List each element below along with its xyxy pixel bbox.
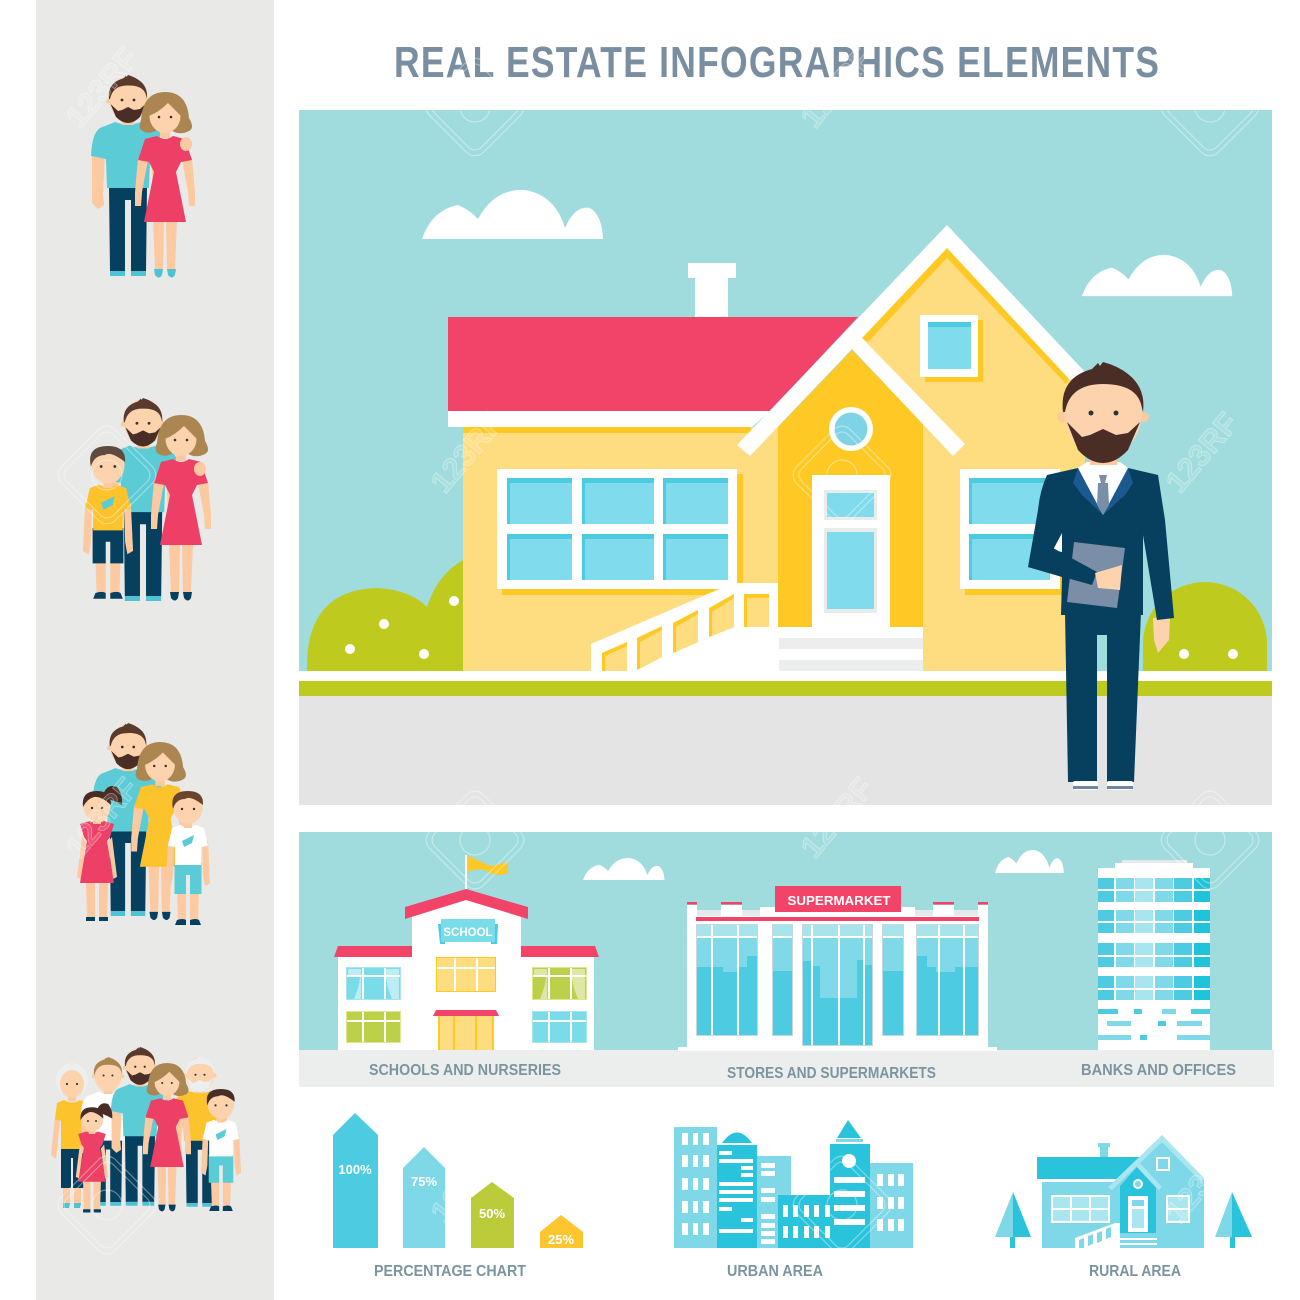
parapet [687,900,988,1047]
steps [778,627,923,672]
watermark text: 123RF [424,1136,510,1229]
family: couple with two children [77,723,210,925]
entrance block [778,350,923,627]
right hand [1153,618,1170,653]
gable yellow stripe [862,248,1070,384]
ground stripes [299,671,1272,805]
icon: cloud [995,850,1064,873]
chimney [688,263,736,318]
building 3 [757,1156,791,1248]
hand on shoulder [194,462,206,476]
watermark text: 123RF [424,406,510,499]
folder [1067,542,1125,608]
left hand [1095,565,1122,590]
family: couple [91,75,195,278]
door [433,1010,499,1050]
woman [131,742,189,920]
watermark text: 123RF [59,771,145,864]
windows [682,1133,904,1244]
right window [960,469,1065,595]
family: three generations [51,1047,241,1213]
icon: cloud right [1082,255,1232,296]
base [678,1047,997,1051]
agent man [1028,362,1174,790]
walls [1042,1140,1204,1248]
main roof [405,889,528,919]
panel: main house scene [299,110,1272,805]
values: 75% [411,1174,437,1189]
building 1 [674,1127,717,1248]
glass panels [697,925,978,1045]
father [81,1057,135,1206]
left wing wall [463,427,783,671]
large window [497,469,743,595]
round window [1133,1179,1143,1189]
right window [1166,1195,1190,1223]
house [448,225,1085,672]
roof [1037,1157,1141,1179]
watermark text: 123RF [59,41,145,134]
panel: amenities [299,832,1274,1087]
values: 50% [479,1206,505,1221]
shoes [1073,781,1133,790]
sky [299,110,1272,671]
bar 100% [333,1113,378,1248]
center block [412,895,521,1050]
large window [1051,1195,1110,1223]
flag [465,855,508,889]
parapet band [697,910,978,916]
icon: cloud [583,858,664,880]
title: REAL ESTATE INFOGRAPHICS ELEMENTS [394,39,1159,87]
watermark text: 123RF [1159,406,1245,499]
rural area icon [995,1135,1252,1280]
trousers [1065,612,1141,782]
building 2 [717,1145,757,1248]
window mullions [347,958,586,1042]
gable wall [855,248,1085,671]
school sign: SCHOOL [443,927,493,939]
rural label: RURAL AREA [1089,1263,1181,1280]
tower [830,1144,870,1248]
watermark text: 123RF [794,41,880,134]
label: SCHOOLS AND NURSERIES [369,1062,561,1079]
values: 100% [338,1162,372,1177]
chart label: PERCENTAGE CHART [374,1263,526,1280]
spire [837,1120,861,1138]
parapet tips [687,902,988,904]
ramp railing [591,583,778,672]
woman [135,92,195,278]
bush blossoms [345,596,1238,659]
man [92,723,164,916]
urban label: URBAN AREA [727,1263,823,1280]
jacket [1028,468,1174,620]
tie [1097,475,1109,515]
glass top bands [697,925,978,936]
label: STORES AND SUPERMARKETS [727,1065,936,1082]
boy [83,446,133,599]
right bushes [1143,582,1267,706]
boy [166,791,210,925]
bar 75% [403,1147,445,1248]
ears [1057,412,1149,422]
woman [151,415,211,600]
head [1064,367,1142,457]
windows [346,958,586,1042]
values [338,1162,574,1247]
man [106,398,180,601]
curtains [348,969,585,999]
tree right [1215,1192,1252,1248]
steps [1120,1238,1157,1245]
entrance [1120,1167,1156,1233]
wings [338,957,594,1050]
left bushes [307,560,463,671]
girl [76,1103,112,1213]
glass skyline [697,956,978,1045]
boy [201,1089,241,1211]
sign: SUPERMARKET [788,893,891,908]
hair [1063,362,1143,412]
man [91,75,165,276]
gable window [1156,1157,1170,1171]
man [111,1047,169,1206]
red roof [448,317,858,411]
office tower [1098,860,1210,1050]
mullions [697,925,978,1045]
values: 25% [548,1232,574,1247]
label: BANKS AND OFFICES [1081,1062,1236,1079]
beard [1067,422,1140,463]
grandpa [172,1056,228,1207]
hand on shoulder [180,137,192,151]
gable window [920,315,983,382]
tree left [995,1192,1031,1248]
gable trim [1108,1135,1204,1190]
sign [775,886,901,912]
eyes [1088,410,1118,416]
dome [722,1132,752,1143]
floor slabs [1098,889,1210,990]
woman [143,1063,191,1211]
school sign [438,919,498,944]
clock [842,1154,856,1168]
school [334,855,599,1050]
building 6 [870,1163,913,1248]
glass frames [696,924,979,1046]
family: couple with son [83,398,211,601]
icon: cloud left [422,190,603,239]
watermark text: 123RF [1159,1136,1245,1229]
gable trim [737,225,1085,456]
door [1128,1196,1148,1232]
wing roofs [334,946,599,957]
watermark text: 123RF [794,771,880,864]
supermarket [678,886,997,1051]
lapels [1073,468,1133,515]
ramp [1075,1223,1120,1248]
arm gap [1053,533,1062,552]
red strip [696,917,979,921]
neck [1090,448,1117,465]
girl [77,786,122,921]
label band [299,1050,1274,1087]
percentage chart [333,1113,583,1280]
sky [299,832,1272,1050]
bar 50% [471,1182,514,1248]
urban area icon [674,1120,913,1280]
bar 25% [540,1215,583,1248]
panel: families sidebar [36,0,274,1300]
shirt collar [1078,462,1128,515]
lobby marks [1098,1009,1210,1040]
door [812,475,890,630]
round window [829,407,873,451]
building 4 [778,1195,870,1248]
chimney [1098,1143,1110,1157]
grandma [51,1063,92,1208]
sleeve [1028,548,1097,585]
glass columns [1098,878,1210,1000]
